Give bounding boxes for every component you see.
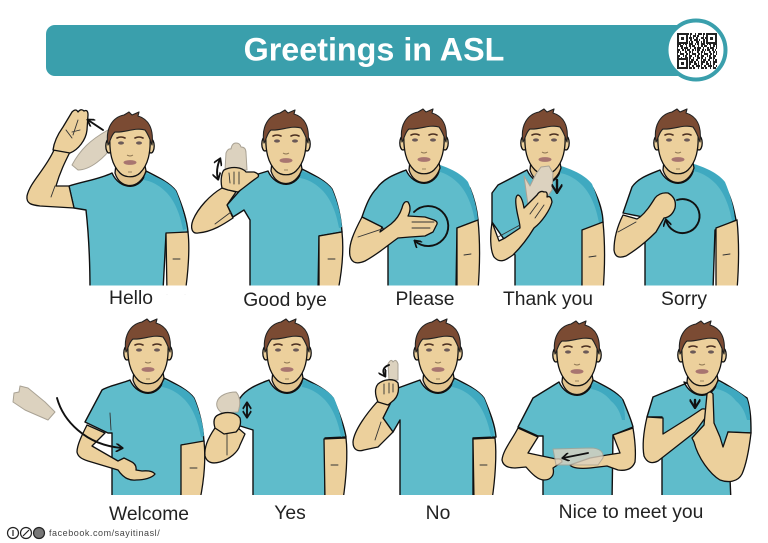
- label: Hello: Hello: [109, 288, 153, 309]
- white strip closing row 2: [0, 495, 768, 504]
- footer: facebook link: facebook.com/sayitinasl/: [49, 528, 160, 538]
- label: Yes: Yes: [274, 503, 306, 524]
- label: Good bye: Good bye: [243, 290, 327, 311]
- QR code badge: [666, 20, 726, 80]
- figure: Thank you: [491, 109, 604, 292]
- label: Sorry: Sorry: [661, 289, 707, 310]
- figure: Welcome: [13, 319, 205, 500]
- title: Greetings in ASL: [244, 32, 504, 68]
- label: Nice to meet you: Nice to meet you: [559, 502, 703, 523]
- label: Please: Please: [396, 289, 454, 310]
- figure: Sorry: [614, 109, 738, 290]
- figure: Please: [350, 109, 480, 290]
- label: Thank you: Thank you: [503, 289, 593, 310]
- label: No: No: [426, 503, 450, 524]
- label: Welcome: Welcome: [109, 504, 189, 525]
- figure: Nice to meet you (left): [502, 321, 635, 502]
- figure: Nice to meet you (right): [643, 321, 751, 502]
- footer: licence icons: [8, 528, 44, 538]
- figure: Yes: [205, 319, 347, 500]
- white strip closing row 1: [0, 286, 768, 294]
- figure: No: [353, 319, 496, 500]
- figure: Hello: [27, 110, 189, 294]
- title banner: [46, 25, 686, 76]
- figure: Good bye: [192, 110, 343, 291]
